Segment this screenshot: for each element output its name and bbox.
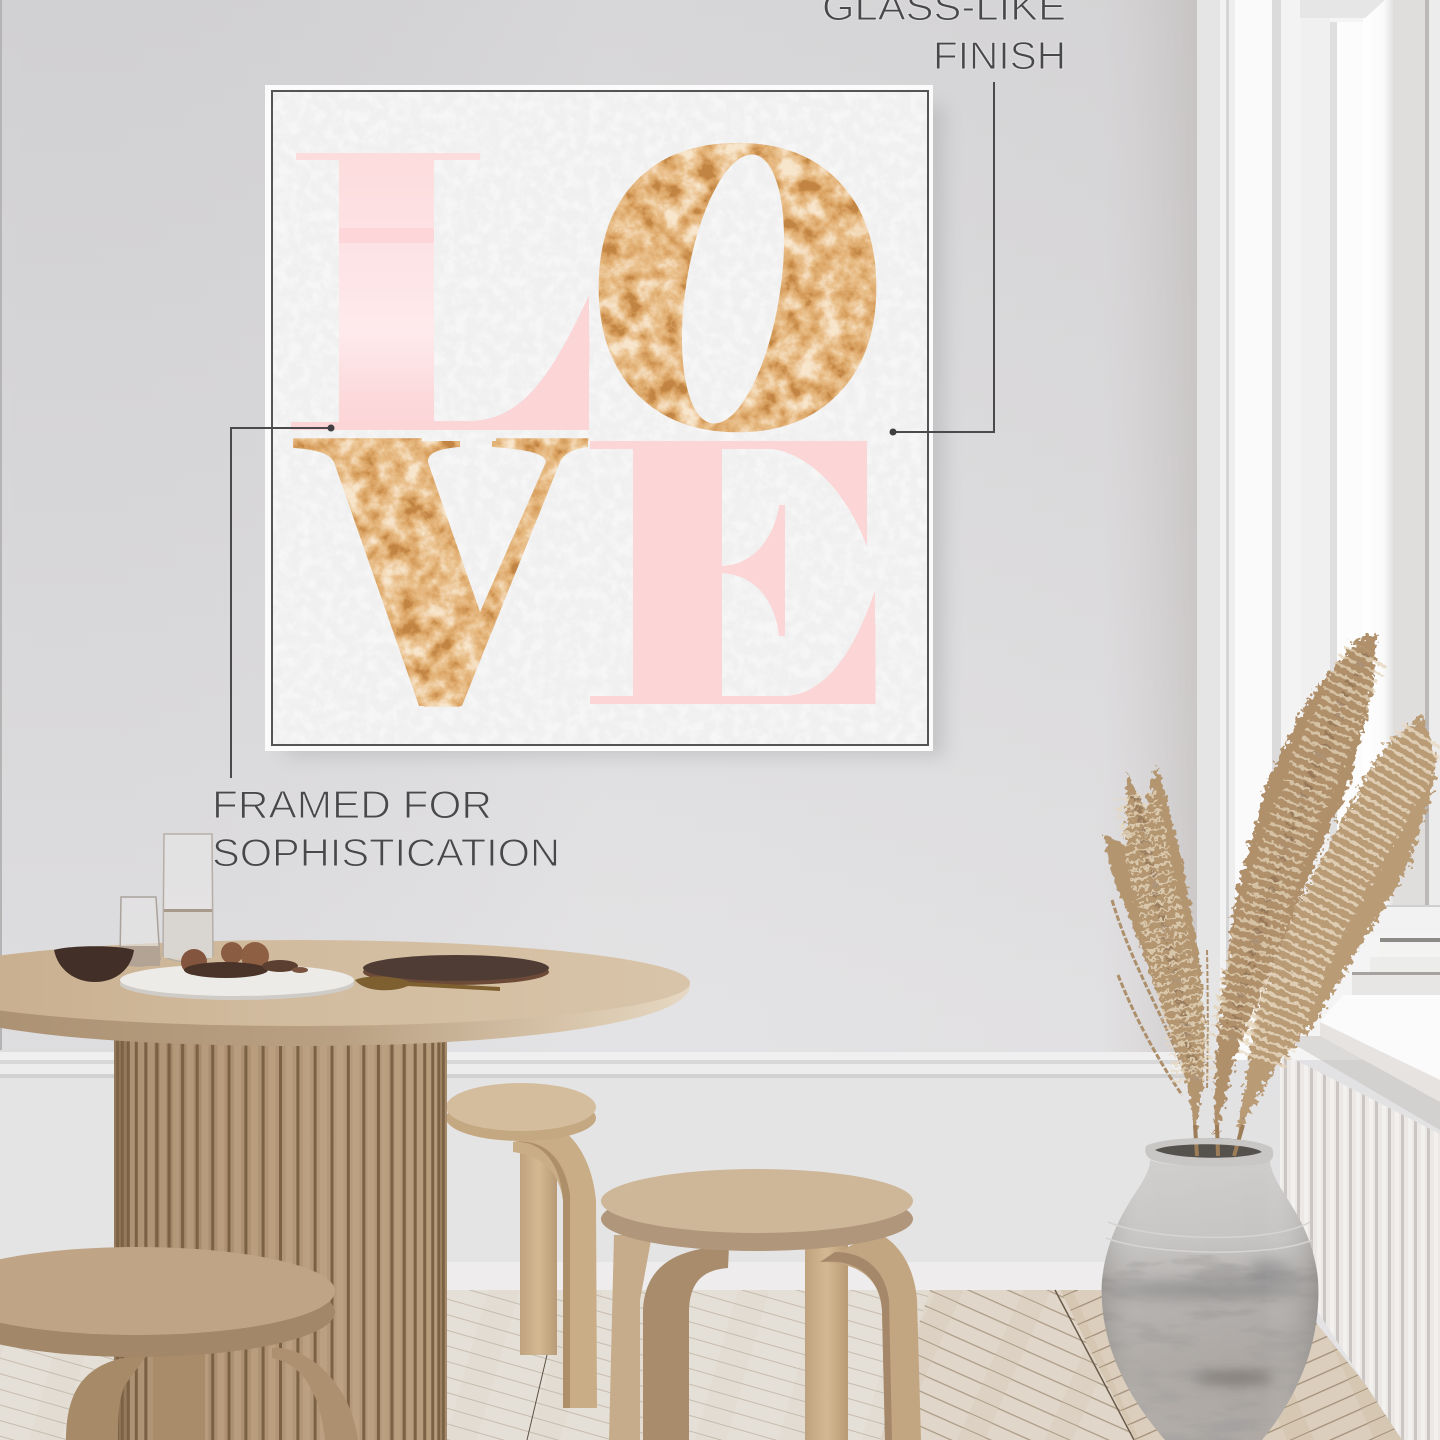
table top [0,940,690,1026]
letter E: E [592,356,898,783]
round table [0,940,690,1440]
label text: FINISH [933,35,1066,78]
rear legs [609,1235,652,1440]
clay texture and smudges [1095,1255,1325,1440]
framed LOVE artwork [265,70,945,783]
small glass [120,897,160,966]
leader line [893,82,994,432]
radiator [1280,1052,1440,1440]
glass carafe [163,834,213,962]
dark bowl [54,946,134,982]
stems and wisps [1112,900,1245,1160]
stool seat top [0,1247,335,1335]
plume ribs [1135,650,1425,1080]
leader dot [890,428,896,436]
leader dot [328,424,334,432]
fluted pedestal [114,1030,447,1440]
back stool [446,1083,597,1408]
pampas grass [1105,633,1437,1160]
nuts on board [181,942,308,978]
bent front legs [643,1246,729,1440]
label text: SOPHISTICATION [212,832,560,875]
letter V [293,438,588,707]
letter L [291,153,590,430]
stool seat side [601,1187,913,1251]
stool seat side [0,1267,335,1357]
letter E [590,441,876,704]
vase body [1102,1160,1318,1440]
leader line [231,428,331,778]
table setting [54,834,549,1000]
letter O: O [640,139,835,431]
windowsill [1280,995,1440,1130]
callout: framed for sophistication [212,424,560,875]
ridges [1106,1222,1312,1252]
white outer frame [265,85,933,751]
letter L: L [306,70,601,508]
front stool [601,1169,921,1440]
floor [0,1290,1410,1440]
label text: FRAMED FOR [212,784,492,827]
vase opening [1147,1138,1271,1164]
left stool [0,1247,358,1440]
marble board [120,964,354,1000]
plumes [1105,633,1437,1140]
stacked books on windowsill [1352,938,1440,995]
vase rim [1145,1138,1273,1167]
table edge [0,985,690,1046]
stool seat top [601,1169,913,1233]
stems inside vase [1195,1125,1243,1156]
spoon [355,976,500,991]
frame shadow [285,105,945,757]
vase shading [1102,1160,1318,1440]
artwork canvas [273,92,927,744]
dark inner shadow line [271,90,929,746]
window frame and mouldings [1197,0,1440,1060]
glitter texture [273,92,927,744]
ceramic vase [1095,1125,1325,1440]
letter V: V [296,356,586,777]
wainscot rail and skirting [0,1052,1200,1290]
dark wooden plate [363,955,549,985]
callout: glass-like finish [822,0,1066,436]
